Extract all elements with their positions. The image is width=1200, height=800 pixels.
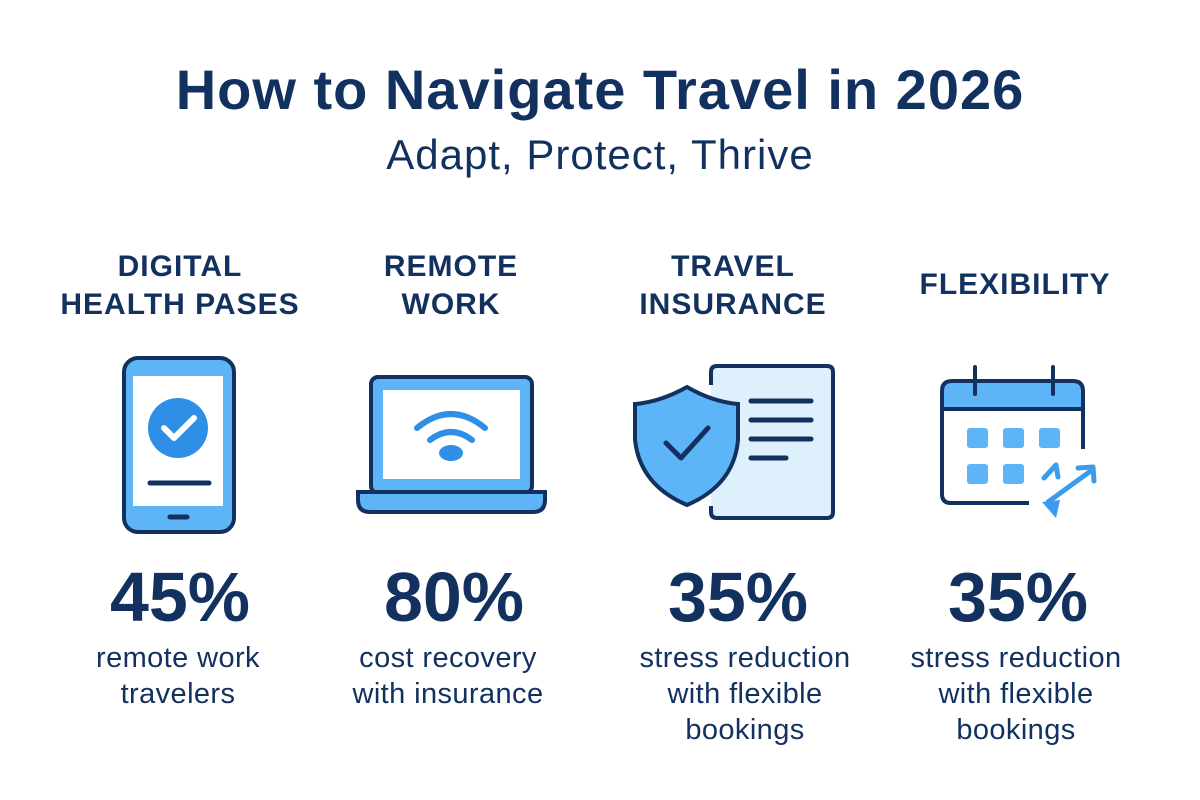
- description: stress reduction 1: bookings: [685, 714, 805, 746]
- heading: remote work: REMOTE: [384, 250, 518, 283]
- description: remote work travelers: [96, 642, 260, 710]
- heading: travel insurance: INSURANCE: [639, 288, 827, 321]
- description: cost recovery: with insurance: [352, 678, 543, 710]
- heading: digital health passes: DIGITAL: [118, 250, 242, 283]
- description: stress reduction 2: bookings: [956, 714, 1076, 746]
- description: cost recovery: cost recovery: [359, 642, 537, 674]
- icon: laptop: [358, 377, 545, 512]
- icon: shield and document: [635, 366, 833, 518]
- heading: travel insurance: TRAVEL: [671, 250, 795, 283]
- description: stress reduction 1: with flexible: [667, 678, 823, 710]
- description: stress reduction 2: [910, 642, 1122, 746]
- description: stress reduction 2: stress reduction: [910, 642, 1122, 674]
- heading: remote work: WORK: [402, 288, 500, 321]
- description: stress reduction 2: with flexible: [938, 678, 1094, 710]
- stat: 35% flexibility: 35%: [948, 558, 1088, 636]
- heading: travel insurance: [639, 250, 827, 321]
- heading: remote work: [384, 250, 518, 321]
- description: remote work travelers: remote work: [96, 642, 260, 674]
- heading: flexibility: FLEXIBILITY: [920, 268, 1110, 301]
- description: cost recovery: [352, 642, 543, 710]
- description: stress reduction 1: stress reduction: [639, 642, 851, 674]
- description: remote work travelers: travelers: [121, 678, 235, 710]
- icon: phone: [124, 358, 234, 532]
- heading: digital health passes: [60, 250, 300, 321]
- title: How to Navigate Travel in 2026: [176, 58, 1024, 121]
- stat: 45%: 45%: [110, 558, 250, 636]
- description: stress reduction 1: [639, 642, 851, 746]
- heading: digital health passes: HEALTH PASES: [60, 288, 300, 321]
- stat: 80%: 80%: [384, 558, 524, 636]
- icon: calendar with plane: [941, 367, 1094, 518]
- subtitle: Adapt, Protect, Thrive: [386, 131, 814, 178]
- stat: 35% insurance: 35%: [668, 558, 808, 636]
